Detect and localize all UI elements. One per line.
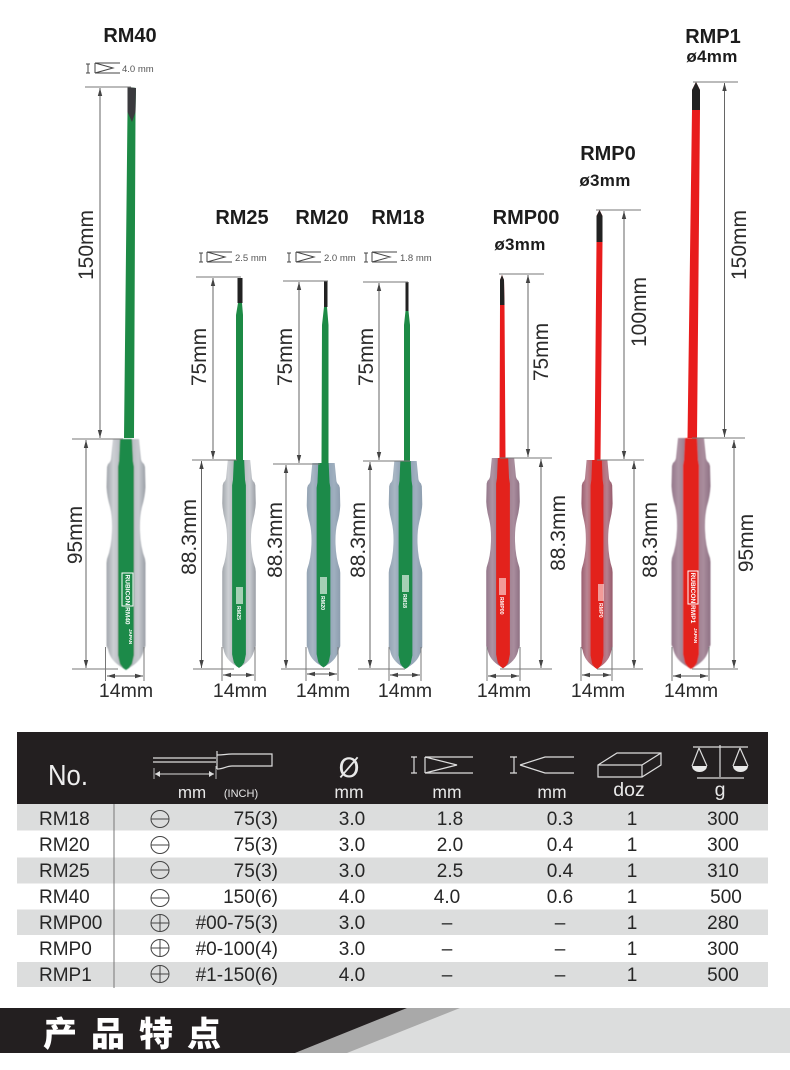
dimension: 75mm [188, 277, 241, 460]
dimension: 14mm [664, 647, 718, 702]
row: RM40: RM40 [39, 887, 90, 908]
row: RM25: 310 [707, 861, 739, 882]
icon: blade width 2.0 mm [287, 252, 356, 264]
icon: blade width 4.0 mm [86, 63, 154, 75]
heading: RM40: RM40 [103, 25, 157, 47]
tip size: ø3mm [579, 171, 631, 190]
heading: RM20: RM20 [295, 207, 349, 229]
dimension: 150mm: 150mm [728, 210, 751, 280]
dimension: 14mm [213, 647, 267, 702]
row: RMP00: RMP00 [39, 913, 102, 934]
dimension: 75mm: 75mm [530, 323, 553, 381]
handle: JAPAN [128, 629, 133, 645]
dimension: 14mm [571, 647, 625, 702]
row: RMP1: – [555, 965, 566, 986]
row: RMP00: 280 [707, 913, 739, 934]
dimension: 88.3mm: 88.3mm [178, 499, 201, 575]
column: diameter: mm [334, 782, 364, 802]
row: RM40: 500 [710, 887, 742, 908]
column: length: (INCH) [224, 788, 258, 800]
row: RMP1: #1-150(6) [196, 965, 278, 986]
heading: RMP1: RMP1 [685, 26, 741, 48]
handle [307, 463, 340, 667]
dimension: 150mm: 150mm [75, 210, 98, 280]
column: weight: g [715, 779, 725, 801]
icon: blade width 2.5 mm [199, 252, 267, 264]
dimension: 14mm: 14mm [378, 680, 432, 702]
column: blade thickness [510, 757, 574, 802]
handle [672, 438, 710, 669]
icon: blade width 2.0 mm: 2.0 mm [324, 253, 356, 264]
row: RM20 [39, 835, 739, 856]
heading: RM18: RM18 [371, 207, 425, 229]
dimension: 88.3mm: 88.3mm [264, 502, 287, 578]
banner heading: 产品特点 [43, 1007, 235, 1056]
row: RM18: 300 [707, 809, 739, 830]
handle: RMP1 [689, 605, 696, 624]
dimension: 14mm [296, 647, 350, 702]
handle label: RMP0 [597, 603, 603, 618]
row: RMP1: 500 [707, 965, 739, 986]
row: RM25: RM25 [39, 861, 90, 882]
row: RM18 [39, 809, 739, 830]
tool: RMP00 cross screwdriver [477, 207, 570, 702]
row: RM20: RM20 [39, 835, 90, 856]
handle: RUBICON [124, 574, 130, 606]
row: RMP0: – [442, 939, 453, 960]
tip size: ø4mm [686, 47, 738, 66]
column divider [113, 804, 115, 988]
dimension: 14mm: 14mm [664, 680, 718, 702]
handle label [319, 577, 327, 610]
row: RMP0: 1 [627, 939, 637, 960]
row: RM40 [39, 887, 742, 908]
handle label [498, 578, 506, 615]
row: RM25: 0.4 [547, 861, 574, 882]
row: RMP0: #0-100(4) [196, 939, 278, 960]
column: No.: No. [48, 760, 88, 792]
row: RMP1: – [442, 965, 453, 986]
row: RMP00: – [555, 913, 566, 934]
row: RM20: 75(3) [234, 835, 278, 856]
column: blade width: mm [432, 782, 462, 802]
tool: RM25 flat screwdriver [178, 207, 269, 702]
row: RM25 [39, 861, 739, 882]
dimension: 14mm [378, 647, 432, 702]
spec table [17, 732, 768, 988]
dimension: 88.3mm: 88.3mm [347, 502, 370, 578]
row: RMP00: – [442, 913, 453, 934]
column: blade width [411, 757, 473, 802]
row: RM20: 1 [627, 835, 637, 856]
column: quantity [598, 753, 661, 801]
table row stripes [17, 804, 768, 987]
row: RM40: 1 [627, 887, 637, 908]
icon: blade width 4.0 mm: 4.0 mm [122, 64, 154, 75]
heading: RMP0: RMP0 [580, 143, 636, 165]
shaft [322, 281, 328, 463]
dimension: 88.3mm: 88.3mm [639, 502, 662, 578]
icon: blade width 2.5 mm: 2.5 mm [235, 253, 267, 264]
dimension: 75mm [355, 282, 410, 461]
column: blade thickness: mm [537, 782, 567, 802]
dimension: 75mm: 75mm [188, 328, 211, 386]
icon: blade width 1.8 mm [364, 252, 432, 264]
dimension: 75mm [273, 281, 328, 464]
column: length [153, 751, 272, 802]
row: RM25: 2.5 [437, 861, 463, 882]
dimension: 95mm [64, 439, 123, 669]
shaft [124, 87, 136, 438]
row: RM18: 3.0 [339, 809, 365, 830]
row: RM40: 150(6) [223, 887, 278, 908]
row: RM40: 0.6 [547, 887, 573, 908]
column: weight [692, 745, 748, 801]
handle [581, 460, 613, 669]
row: RM18: 75(3) [234, 809, 278, 830]
row: RM20: 2.0 [437, 835, 463, 856]
row: RM18: 0.3 [547, 809, 573, 830]
row: RM18: 1.8 [437, 809, 463, 830]
handle label: RM25 [235, 606, 241, 620]
row: RM40: 4.0 [434, 887, 460, 908]
column: diameter [334, 753, 364, 802]
row: RMP0: – [555, 939, 566, 960]
column: diameter: Ø [338, 753, 360, 784]
handle [222, 460, 256, 668]
dimension: 95mm: 95mm [64, 506, 87, 564]
row: RMP00: #00-75(3) [196, 913, 278, 934]
row: RM40: 4.0 [339, 887, 365, 908]
dimension: 14mm: 14mm [213, 680, 267, 702]
dimension: 14mm [99, 647, 153, 702]
dimension: 75mm: 75mm [355, 328, 378, 386]
dimension: 14mm: 14mm [571, 680, 625, 702]
handle [486, 458, 520, 668]
row: RMP0: 3.0 [339, 939, 365, 960]
row: RMP1: 1 [627, 965, 637, 986]
heading: RMP00: RMP00 [493, 207, 559, 229]
row: RMP0: RMP0 [39, 939, 92, 960]
handle label: RMP00 [498, 597, 504, 615]
row: RMP00 [39, 913, 739, 934]
tip size: ø3mm [494, 235, 546, 254]
tool: RM40 flat screwdriver [64, 25, 157, 702]
dimension: 95mm: 95mm [735, 514, 758, 572]
handle: RUBICON [689, 572, 696, 604]
dimension: 14mm: 14mm [296, 680, 350, 702]
handle [389, 461, 422, 669]
dimension: 14mm [477, 647, 531, 702]
section banner [0, 1007, 790, 1056]
handle: RM40 [124, 607, 130, 625]
row: RM20: 3.0 [339, 835, 365, 856]
handle label [401, 575, 409, 608]
icon: blade width 1.8 mm: 1.8 mm [400, 253, 432, 264]
dimension: 100mm [596, 210, 651, 460]
handle [106, 439, 146, 670]
shaft [594, 210, 602, 460]
dimension: 88.3mm: 88.3mm [547, 495, 570, 571]
dimension: 14mm: 14mm [99, 680, 153, 702]
row: RM25: 3.0 [339, 861, 365, 882]
row: RMP0: 300 [707, 939, 739, 960]
tool: RM18 flat screwdriver [347, 207, 432, 702]
tool: RMP0 cross screwdriver [571, 143, 662, 702]
tool: RM20 flat screwdriver [264, 207, 356, 702]
shaft [236, 278, 243, 460]
row: RMP1: RMP1 [39, 965, 92, 986]
dimension: 75mm: 75mm [274, 328, 297, 386]
row: RM20: 300 [707, 835, 739, 856]
handle label: RM20 [319, 596, 325, 610]
dimension: 75mm [499, 274, 553, 458]
handle label [235, 587, 243, 620]
row: RMP1: 4.0 [339, 965, 365, 986]
handle label: RM18 [401, 594, 407, 608]
dimension: 150mm [692, 82, 751, 438]
column: quantity: doz [613, 779, 645, 801]
shaft [688, 82, 700, 438]
tool: RMP1 cross screwdriver [664, 26, 758, 702]
handle label [597, 584, 604, 618]
table header [17, 732, 768, 804]
heading: RM25: RM25 [215, 207, 269, 229]
row: RMP1 [39, 965, 739, 986]
shaft [500, 275, 506, 458]
row: RM18: RM18 [39, 809, 90, 830]
dimension: 14mm: 14mm [477, 680, 531, 702]
row: RM25: 1 [627, 861, 637, 882]
row: RMP0 [39, 939, 739, 960]
handle: JAPAN [693, 628, 698, 644]
row: RM18: 1 [627, 809, 637, 830]
dimension: 100mm: 100mm [628, 277, 651, 347]
shaft [404, 282, 410, 461]
row: RMP00: 1 [627, 913, 637, 934]
row: RM25: 75(3) [234, 861, 278, 882]
column: length: mm [178, 783, 206, 802]
row: RM20: 0.4 [547, 835, 574, 856]
row: RMP00: 3.0 [339, 913, 365, 934]
